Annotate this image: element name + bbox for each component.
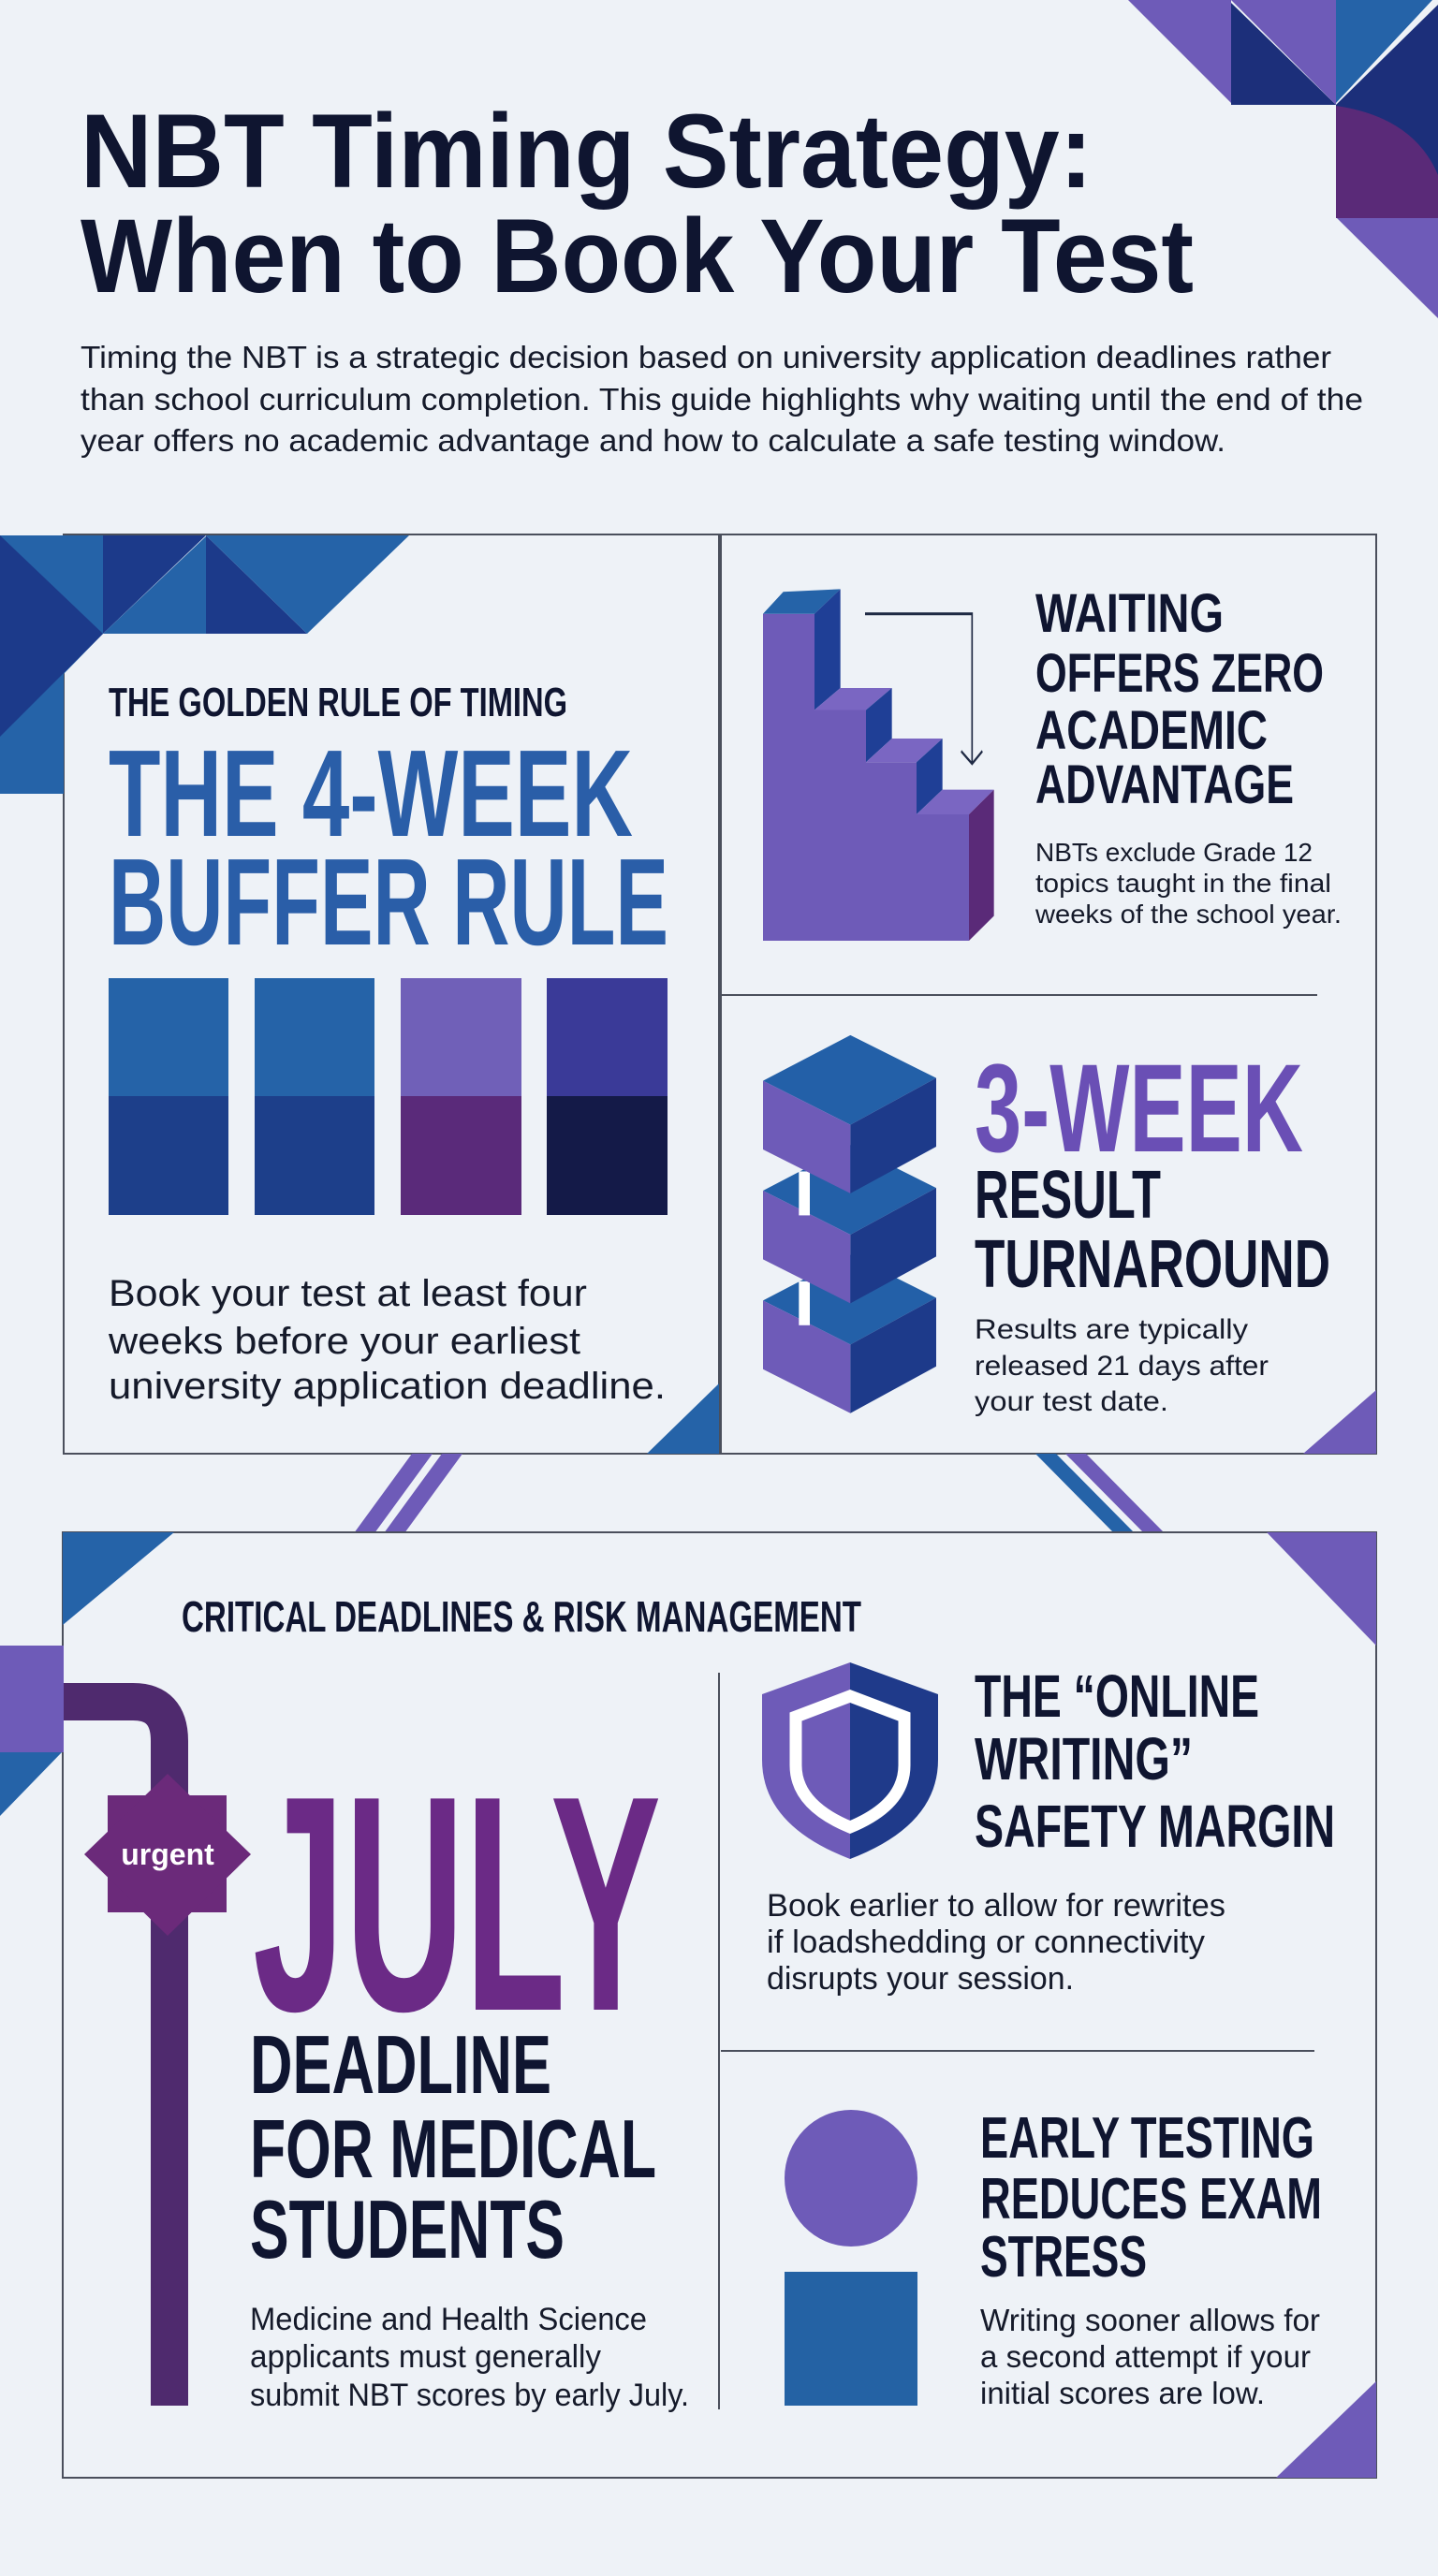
heading: waiting offers zero academic advantage bbox=[1035, 583, 1324, 815]
panel: right top bbox=[721, 534, 1376, 1454]
heading: online writing safety margin bbox=[975, 1662, 1335, 1860]
heading: early testing reduces exam stress: EARLY TESTING bbox=[980, 2106, 1314, 2171]
label: golden rule: THE GOLDEN RULE OF TIMING bbox=[109, 680, 567, 725]
decoration: panel corner triangles bbox=[0, 535, 409, 794]
heading: deadline for medical students: FOR MEDICAL bbox=[250, 2102, 656, 2195]
heading: early testing reduces exam stress: STRESS bbox=[980, 2225, 1147, 2290]
decoration: top-right geometric corner bbox=[1128, 0, 1438, 318]
connector: left stripes bbox=[354, 1454, 462, 1533]
icon: shield bbox=[762, 1662, 938, 1859]
intro text bbox=[81, 340, 1363, 458]
heading: online writing safety margin: THE “ONLINE bbox=[975, 1662, 1259, 1730]
heading: deadline for medical students: DEADLINE bbox=[250, 2018, 551, 2111]
text: book earlier rewrites bbox=[767, 1888, 1225, 1997]
text: medicine applicants: applicants must generally bbox=[250, 2339, 601, 2375]
heading: online writing safety margin: WRITING” bbox=[975, 1725, 1193, 1793]
text: book four weeks before: weeks before your earliest bbox=[108, 1321, 580, 1362]
panel: critical deadlines & risk management bbox=[0, 1532, 1376, 2478]
text: results 21 days: your test date. bbox=[975, 1386, 1168, 1417]
text: writing sooner: Writing sooner allows for bbox=[980, 2303, 1320, 2337]
heading: 4-week buffer rule: THE 4-WEEK bbox=[109, 724, 633, 862]
text: NBT excludes grade 12: weeks of the school year. bbox=[1034, 900, 1342, 929]
panel: 4-week buffer rule bbox=[0, 534, 719, 1454]
intro text: than school curriculum completion. This guide highlights why waiting until the end of the bbox=[81, 382, 1363, 417]
text: medicine applicants: Medicine and Health Science bbox=[250, 2302, 647, 2337]
text: NBT excludes grade 12 bbox=[1034, 838, 1342, 929]
icon: stacked cubes bbox=[763, 1035, 936, 1413]
text: writing sooner bbox=[980, 2303, 1320, 2410]
heading: critical deadlines: CRITICAL DEADLINES & RISK MANAGEMENT bbox=[182, 1592, 861, 1641]
intro text: Timing the NBT is a strategic decision based on university application deadlines rather bbox=[81, 340, 1331, 374]
text: book earlier rewrites: disrupts your session. bbox=[767, 1961, 1074, 1997]
title: When to Book Your Test bbox=[81, 198, 1194, 315]
text: book four weeks before: university application deadline. bbox=[109, 1366, 666, 1407]
heading: early testing reduces exam stress: REDUCES EXAM bbox=[980, 2167, 1322, 2232]
heading: deadline for medical students: STUDENTS bbox=[250, 2183, 565, 2276]
heading: 4-week buffer rule: BUFFER RULE bbox=[109, 833, 668, 971]
heading: 3-week result turnaround: RESULT bbox=[975, 1158, 1161, 1233]
chart: four week blocks bbox=[109, 978, 668, 1215]
text: book four weeks before: Book your test at least four bbox=[109, 1273, 587, 1314]
title bbox=[81, 93, 1194, 315]
heading: early testing reduces exam stress bbox=[980, 2106, 1322, 2290]
heading: waiting offers zero academic advantage: ACADEMIC bbox=[1035, 700, 1268, 761]
heading: 4-week buffer rule bbox=[109, 724, 668, 971]
connector: right stripes bbox=[1035, 1454, 1165, 1533]
text: medicine applicants bbox=[250, 2302, 689, 2413]
heading: deadline for medical students bbox=[250, 2018, 656, 2276]
icon: circle and square bbox=[785, 2110, 917, 2406]
icon: timeline pipe with urgent badge bbox=[64, 1702, 251, 2406]
icon: timeline pipe with urgent badge: urgent bbox=[121, 1837, 214, 1871]
text: results 21 days: Results are typically bbox=[975, 1314, 1248, 1345]
text: book earlier rewrites: if loadshedding or connectivity bbox=[767, 1925, 1205, 1960]
text: NBT excludes grade 12: NBTs exclude Grade 12 bbox=[1035, 838, 1313, 867]
text: medicine applicants: submit NBT scores by early July. bbox=[250, 2378, 689, 2413]
text: writing sooner: a second attempt if your bbox=[980, 2339, 1311, 2374]
title: NBT Timing Strategy: bbox=[81, 93, 1093, 210]
heading: waiting offers zero academic advantage: WAITING bbox=[1035, 583, 1224, 644]
heading: waiting offers zero academic advantage: ADVANTAGE bbox=[1035, 754, 1294, 815]
heading: JULY: JULY bbox=[253, 1732, 661, 2075]
text: results 21 days bbox=[975, 1314, 1269, 1417]
intro text: year offers no academic advantage and how to calculate a safe testing window. bbox=[81, 423, 1225, 458]
icon: descending staircase with arrow bbox=[763, 589, 994, 941]
text: results 21 days: released 21 days after bbox=[975, 1351, 1269, 1382]
text: writing sooner: initial scores are low. bbox=[980, 2376, 1265, 2410]
text: book earlier rewrites: Book earlier to allow for rewrites bbox=[767, 1888, 1225, 1924]
heading: 3-week result turnaround bbox=[975, 1039, 1330, 1302]
heading: waiting offers zero academic advantage: OFFERS ZERO bbox=[1035, 643, 1324, 704]
text: NBT excludes grade 12: topics taught in the final bbox=[1035, 869, 1331, 898]
text: book four weeks before bbox=[108, 1273, 666, 1407]
